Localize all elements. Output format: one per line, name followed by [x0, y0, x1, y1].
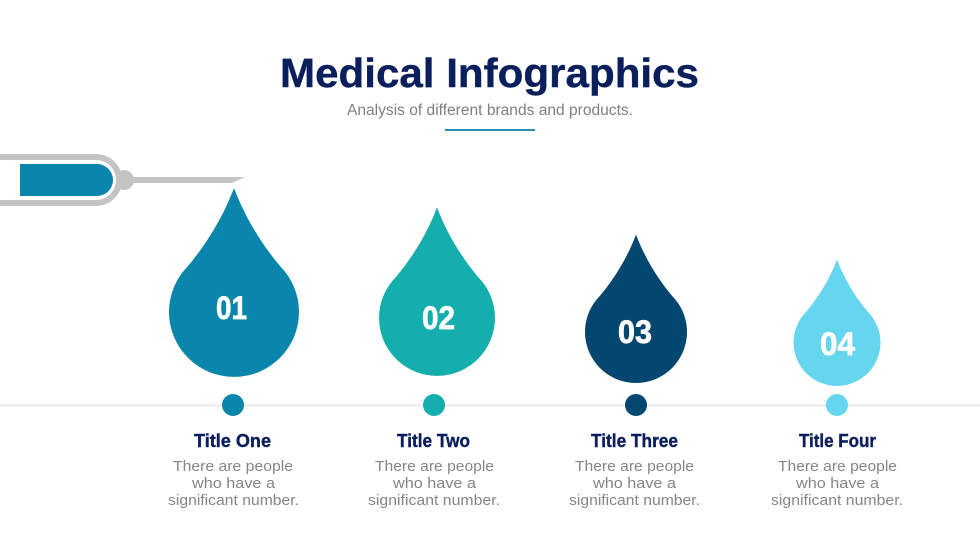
drop 4: [794, 260, 880, 386]
title: Medical Infographics: [280, 50, 699, 96]
drop 3: [585, 235, 687, 383]
drop 4: 04: [820, 326, 855, 362]
drop 2: 02: [422, 300, 455, 336]
column 2 text: There are people: [375, 458, 494, 475]
column 1 text: who have a: [191, 475, 276, 492]
column 1 text: There are people: [173, 458, 293, 475]
icon: syringe: [0, 157, 245, 203]
column 2 text: [368, 431, 500, 509]
column 4 text: [771, 431, 903, 509]
column 3 text: [569, 431, 700, 509]
column 2 text: who have a: [392, 475, 477, 492]
column 3 text: who have a: [592, 475, 677, 492]
column 3 text: significant number.: [569, 492, 700, 509]
drop 2: [379, 207, 495, 376]
column 4 marker: [826, 394, 848, 416]
column 1 text: Title One: [194, 431, 271, 451]
column 4 text: Title Four: [799, 431, 876, 451]
drop 3: 03: [618, 314, 652, 350]
column 1 marker: [222, 394, 244, 416]
column 3 text: There are people: [575, 458, 694, 475]
drop 1: [169, 188, 299, 377]
column 2 text: Title Two: [397, 431, 470, 451]
subtitle: Analysis of different brands and products.: [347, 102, 633, 119]
column 1 text: significant number.: [168, 492, 299, 509]
column 4 text: significant number.: [771, 492, 903, 509]
title underline: [445, 129, 535, 131]
column 2 marker: [423, 394, 445, 416]
column 4 text: There are people: [778, 458, 897, 475]
column 4 text: who have a: [795, 475, 880, 492]
column 2 text: significant number.: [368, 492, 500, 509]
column 3 text: Title Three: [591, 431, 678, 451]
timeline line: [0, 404, 980, 407]
column 3 marker: [625, 394, 647, 416]
drop 1: 01: [216, 290, 247, 326]
column 1 text: [168, 431, 299, 509]
